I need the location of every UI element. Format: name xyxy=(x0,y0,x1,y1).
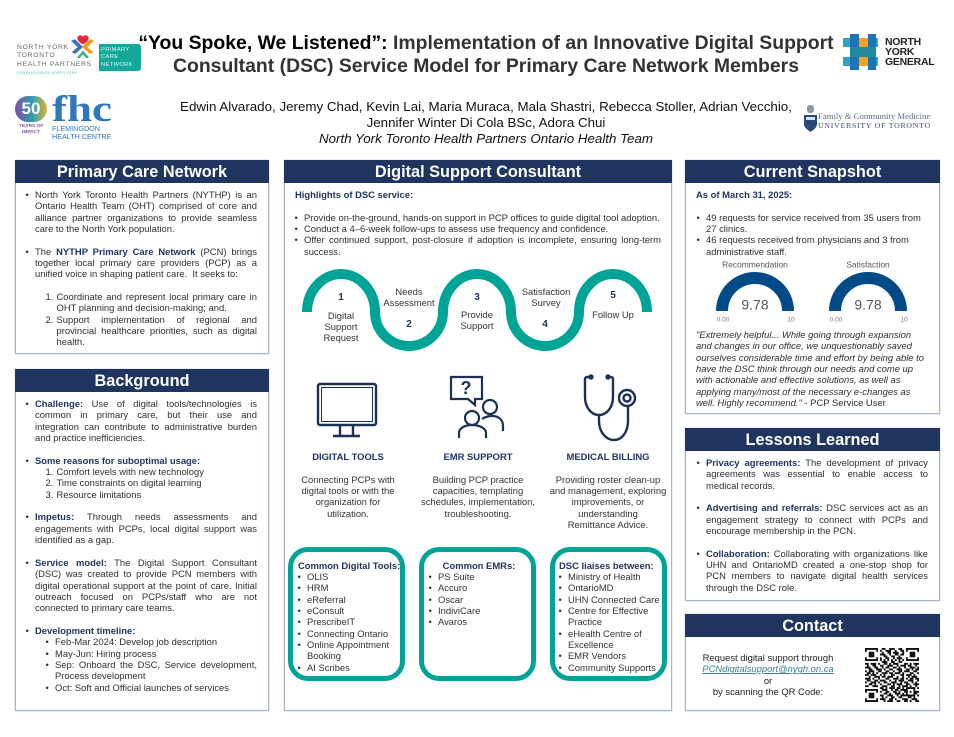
heading: Lessons Learned xyxy=(685,428,940,451)
quote: PCP service user: and changes in our office, we unquestionably saved xyxy=(696,340,912,351)
text: background points: outreach focused on PCPs/staff who are not xyxy=(35,591,257,602)
step 5: Follow Up xyxy=(592,290,634,320)
logo: University of Toronto Family and Community Medicine: UNIVERSITY OF TORONTO xyxy=(818,121,931,130)
card: DSC liaises between: • xyxy=(558,594,562,605)
card: DSC liaises between: • xyxy=(558,628,562,639)
step 3: Provide Support: 3 xyxy=(474,292,480,303)
gauge: Satisfaction 9.78: 9.78 xyxy=(854,296,881,312)
logo: Flemingdon Health Centre: IMPACT xyxy=(22,130,40,135)
card: Common Digital Tools: • xyxy=(298,616,301,627)
text: background points: (DSC) was created to provide PCN members with xyxy=(35,568,257,579)
step 3: Provide Support: Provide xyxy=(461,309,493,320)
card: Common EMRs: IndiviCare xyxy=(438,605,480,616)
card: Common Digital Tools: • xyxy=(298,639,301,650)
service: EMR Support: capacities, templating xyxy=(433,485,523,496)
gauge: Satisfaction 9.78 xyxy=(829,260,908,324)
card: Common Digital Tools: HRM xyxy=(307,582,328,593)
panel: Lessons Learned: • xyxy=(696,457,700,468)
heading: Contact: Contact xyxy=(782,617,843,635)
step 4: Satisfaction Survey: Satisfaction xyxy=(522,286,570,296)
service: Digital Tools: organization for xyxy=(316,496,380,507)
text: contact details: Request digital support through xyxy=(703,652,833,663)
logo: North York Toronto Health Partners and Primary Care Network: CARE xyxy=(101,54,118,60)
text: background points: and practice inefficiencies. xyxy=(35,432,145,443)
card: DSC liaises between: • xyxy=(558,662,562,673)
card: Common Digital Tools: • xyxy=(298,628,301,639)
card: Common Digital Tools: • xyxy=(298,582,301,593)
card: Common Digital Tools: PrescribeIT xyxy=(307,616,355,627)
heading: Primary Care Network: Primary Care Network xyxy=(57,163,227,181)
card: Common Digital Tools: Online Appointment xyxy=(307,639,389,650)
service: EMR Support: Building PCP practice xyxy=(433,474,523,484)
text: network description: care to the North York population. xyxy=(35,223,175,234)
text: network description: alliance partner organizations to provide seamless xyxy=(35,212,257,223)
card: DSC liaises between: Practice xyxy=(568,616,602,627)
heading: Digital Support Consultant: Digital Support Consultant xyxy=(375,163,581,181)
text: highlights of DSC service: success. xyxy=(304,246,341,257)
gauge: Satisfaction 9.78: 0.00 xyxy=(829,316,842,324)
text: lessons xyxy=(696,457,928,593)
logo: Flemingdon Health Centre: YEARS OF xyxy=(19,124,43,129)
card: Common Digital Tools: eConsult xyxy=(307,605,344,616)
text: background points: Development timeline: xyxy=(35,625,135,636)
card: Common EMRs: • xyxy=(428,605,432,616)
service: Digital Tools: Connecting PCPs with xyxy=(301,474,395,484)
service: EMR Support: schedules, implementation, xyxy=(421,496,535,507)
text: lessons: encourage membership in the PCN. xyxy=(706,525,856,536)
text: background points: Service model: The Digital Support Consultant xyxy=(35,557,257,568)
panel: Current Snapshot xyxy=(684,160,940,414)
text: lessons: agreements was essential to enable access to xyxy=(706,468,928,479)
card: Common Digital Tools xyxy=(288,547,405,681)
text: background points: Challenge: Use of digital tools/technologies is xyxy=(35,398,257,409)
text: background points: digital operational support at the point of care. Initial xyxy=(35,580,257,590)
text: background points: May-Jun: Hiring process xyxy=(55,648,156,659)
authors: North York Toronto Health Partners Ontario Health Team xyxy=(319,131,653,146)
panel: Background: • xyxy=(26,455,29,466)
card: Common Digital Tools: • xyxy=(298,662,301,673)
card: DSC liaises between: • xyxy=(558,571,562,582)
gauge: Recommendation 9.78: 0.00 xyxy=(717,316,730,324)
text: highlights of DSC service xyxy=(294,189,661,257)
heading: Lessons Learned: Lessons Learned xyxy=(746,431,879,449)
text: highlights of DSC service: Conduct a 4–6-week follow-ups to assess use frequency and confidence. xyxy=(304,223,608,234)
text: network description: together local primary care providers (PCP) as a xyxy=(35,257,257,268)
panel: Background: • xyxy=(26,511,29,522)
step 3: Provide Support: Support xyxy=(461,320,493,331)
service: Medical Billing: Providing roster clean-up xyxy=(556,474,660,484)
panel: Digital Support Consultant xyxy=(284,160,672,712)
text: network description: provincial healthcare priorities, such as digital xyxy=(56,325,257,336)
quote: PCP service user: applying many/most of the necessary e-changes as xyxy=(696,386,910,397)
logo: Flemingdon Health Centre: fhc xyxy=(52,88,112,129)
logo: North York Toronto Health Partners and Primary Care Network: PRIMARY xyxy=(101,47,130,53)
quote: PCP service user: well. Highly recommend." - PCP Service User xyxy=(696,397,886,408)
text: snapshot figures: • xyxy=(696,212,700,223)
text: background points: 3. xyxy=(46,489,53,500)
text: lessons: Advertising and referrals: DSC services act as an xyxy=(706,502,928,513)
quote: PCP service user: with actionable and effective solutions, as well as xyxy=(696,374,900,385)
text: contact details: PCNdigitalsupport@nygh.on.ca xyxy=(702,663,834,674)
logo: University of Toronto Family and Community Medicine: Family & Community Medicine xyxy=(818,111,930,121)
service: Digital Tools: utilization. xyxy=(327,508,369,519)
heading: Digital Support Consultant xyxy=(284,160,672,183)
text: lessons: PCN members to navigate digital health services xyxy=(706,570,928,581)
step 1: Digital Support Request: Digital xyxy=(328,310,354,320)
text: network description: 2. xyxy=(46,314,53,325)
service: Medical Billing: improvements, or xyxy=(572,496,644,507)
card: Common EMRs: Accuro xyxy=(438,582,467,593)
text: highlights of DSC service: • xyxy=(294,223,298,234)
card: Common EMRs: Common EMRs: xyxy=(443,560,515,570)
text: lessons: Collaboration: Collaborating with organizations like xyxy=(706,548,928,559)
card: Common EMRs xyxy=(419,547,536,681)
logo: North York General: GENERAL xyxy=(885,57,934,68)
step 1: Digital Support Request xyxy=(323,292,359,343)
panel: Contact xyxy=(684,614,940,712)
logo: North York Toronto Health Partners and Primary Care Network: NETWORK xyxy=(101,62,133,68)
text: snapshot figures: As of March 31, 2025: xyxy=(696,189,792,200)
logo: University of Toronto Family and Community Medicine xyxy=(804,105,931,132)
service: EMR Support: EMR SUPPORT xyxy=(444,451,512,462)
icon: computer monitor xyxy=(316,382,378,438)
card: Common Digital Tools: • xyxy=(298,605,301,616)
text: contact details: or xyxy=(764,675,772,686)
service: Medical Billing: MEDICAL BILLING xyxy=(567,451,649,462)
heading: Background: Background xyxy=(94,372,190,390)
card: DSC liaises between xyxy=(550,547,667,681)
card: DSC liaises between: eHealth Centre of xyxy=(568,628,642,639)
logo: Flemingdon Health Centre: HEALTH CENTRE xyxy=(52,132,111,141)
text: network description: Ontario Health Team (OHT) comprised of core and xyxy=(35,200,257,211)
authors: Edwin Alvarado, Jeremy Chad, Kevin Lai, Maria Muraca, Mala Shastri, Rebecca Stoller, Adrian Vecchio, xyxy=(180,99,792,114)
text: background points: 1. xyxy=(46,466,53,477)
logo: North York General: YORK xyxy=(885,47,914,58)
text: background points: identified as a gap. xyxy=(35,534,114,545)
text: snapshot figures xyxy=(696,189,921,257)
card: Common Digital Tools: AI Scribes xyxy=(307,662,350,673)
card: Common EMRs: Avaros xyxy=(438,616,467,627)
text: background points: Some reasons for suboptimal usage: xyxy=(35,455,200,466)
card: DSC liaises between: Community Supports xyxy=(568,662,656,673)
text: highlights of DSC service: Provide on-the-ground, hands-on support in PCP offices to guide digital tool adoption. xyxy=(304,212,660,223)
text: background points: Impetus: Through needs assessments and xyxy=(35,511,257,522)
text: background points: Time constraints on digital learning xyxy=(56,477,202,488)
card: Common Digital Tools: Booking xyxy=(307,650,341,661)
quote: PCP service user: ourselves considerable time and effort by being able to xyxy=(696,352,924,363)
card: Common EMRs: • xyxy=(428,594,432,605)
service: Medical Billing: Remittance Advice. xyxy=(568,519,648,530)
step 1: Digital Support Request: Support xyxy=(325,321,357,332)
step 5: Follow Up: 5 xyxy=(610,290,616,301)
text: contact details: by scanning the QR Code: xyxy=(713,686,823,697)
card: Common Digital Tools: • xyxy=(298,571,301,582)
text: snapshot figures: administrative staff. xyxy=(706,246,787,257)
icon: people with question bubble: ? xyxy=(460,378,472,398)
text: network description: Support implementation of regional and xyxy=(56,314,257,325)
text: background points: Resource limitations xyxy=(56,489,141,500)
text: network description: The NYTHP Primary Care Network (PCN) brings xyxy=(35,246,257,257)
step 5: Follow Up: Follow Up xyxy=(592,309,634,320)
service: Medical Billing: understanding xyxy=(578,508,638,519)
text: background points: Feb-Mar 2024: Develop job description xyxy=(55,636,217,647)
text: background points: 2. xyxy=(46,477,53,488)
step 1: Digital Support Request: Request xyxy=(323,332,359,343)
text: lessons: UHN and OntarioMD created a one-stop shop for xyxy=(706,559,928,570)
logo: Flemingdon Health Centre xyxy=(15,88,112,141)
panel: Background: • xyxy=(26,557,29,568)
logo: North York Toronto Health Partners and Primary Care Network: NORTH YORK xyxy=(17,44,69,51)
service: Digital Tools: DIGITAL TOOLS xyxy=(312,451,384,462)
card: DSC liaises between: OntarioMD xyxy=(568,582,613,593)
service: EMR Support: troubleshooting. xyxy=(445,508,511,519)
text: background points: Process development xyxy=(55,670,145,681)
logo: Flemingdon Health Centre: 50 xyxy=(22,99,40,118)
card: DSC liaises between: EMR Vendors xyxy=(568,650,626,661)
logo: Flemingdon Health Centre: FLEMINGDON xyxy=(52,124,100,132)
heading: Background xyxy=(15,369,269,392)
step 4: Satisfaction Survey xyxy=(522,286,570,330)
heading: Current Snapshot: Current Snapshot xyxy=(744,163,881,181)
quote: PCP service user: "Extremely helpful... While going through expansion xyxy=(696,329,911,340)
authors: Jennifer Winter Di Cola BSc, Adora Chui xyxy=(367,115,605,130)
card: Common Digital Tools: Common Digital Tools: xyxy=(298,560,400,570)
text: background points: Oct: Soft and Official launches of services xyxy=(55,682,229,693)
text: network description: Coordinate and represent local primary care in xyxy=(56,291,257,302)
authors xyxy=(180,99,792,146)
logo: North York General xyxy=(843,34,934,70)
text: background points: connected to primary care teams. xyxy=(35,602,175,613)
panel: Lessons Learned: • xyxy=(696,502,700,513)
text: lessons: Privacy agreements: The development of privacy xyxy=(706,457,928,468)
panel: Background: • xyxy=(26,398,29,409)
QR code xyxy=(865,648,919,702)
text: background points: integration can contribute to administrative burden xyxy=(35,421,257,432)
text: snapshot figures: 27 clinics. xyxy=(706,223,747,234)
text: contact details xyxy=(702,652,834,697)
step 2: Needs Assessment: Assessment xyxy=(383,297,435,308)
text: snapshot figures: 49 requests for service received from 35 users from xyxy=(706,212,921,223)
logo: North York General: NORTH xyxy=(885,36,921,48)
card: Common Digital Tools: OLIS xyxy=(307,571,328,582)
text: snapshot figures: • xyxy=(696,234,700,245)
quote: PCP service user xyxy=(696,329,924,408)
gauge: Recommendation 9.78: 9.78 xyxy=(741,296,769,312)
card: DSC liaises between: DSC liaises between: xyxy=(559,560,654,570)
card: DSC liaises between: • xyxy=(558,605,562,616)
card: Common EMRs: Oscar xyxy=(438,594,463,605)
logo: North York Toronto Health Partners and Primary Care Network xyxy=(17,35,141,75)
step 3: Provide Support xyxy=(461,292,494,331)
card: Common EMRs: • xyxy=(428,571,432,582)
text: lessons: engagement strategy to connect with PCPs and xyxy=(706,514,928,525)
card: DSC liaises between: Centre for Effective xyxy=(568,605,648,616)
logo: North York Toronto Health Partners and Primary Care Network: COMPASSIONATE NORTH YORK xyxy=(17,71,77,75)
card: Common Digital Tools: • xyxy=(298,594,301,605)
text: background points: Comfort levels with new technology xyxy=(56,466,204,477)
text: background points: • xyxy=(46,659,49,670)
step 2: Needs Assessment: 2 xyxy=(406,318,412,330)
card: DSC liaises between: UHN Connected Care xyxy=(568,594,660,605)
text: network description: OHT planning and decision-making; and. xyxy=(56,302,227,313)
panel: Background: • xyxy=(26,625,29,636)
text: network description: 1. xyxy=(46,291,53,302)
gauge: Recommendation 9.78: 10 xyxy=(787,316,795,324)
panel: Primary Care Network: • xyxy=(26,189,29,200)
heading: Current Snapshot xyxy=(685,160,940,183)
service: Medical Billing: and management, exploring xyxy=(550,485,666,496)
card: DSC liaises between: Excellence xyxy=(568,639,614,650)
card: Common EMRs: • xyxy=(428,616,432,627)
panel: Primary Care Network xyxy=(14,160,270,354)
text: background points xyxy=(26,398,257,693)
text: highlights of DSC service: Highlights of DSC service: xyxy=(295,189,413,200)
text: background points: common in primary care, but their use and xyxy=(35,409,257,420)
text: network description: unified voice in shaping patient care. It seeks to: xyxy=(35,268,238,279)
heading: Contact xyxy=(685,614,940,637)
panel: Primary Care Network: • xyxy=(26,246,29,257)
text: background points: • xyxy=(46,682,49,693)
panel: Lessons Learned: • xyxy=(696,548,700,559)
card: DSC liaises between: • xyxy=(558,650,562,661)
quote: PCP service user: have the DSC think through our needs and come up xyxy=(696,363,913,374)
title: Consultant (DSC) Service Model for Primary Care Network Members xyxy=(173,55,799,77)
text: highlights of DSC service: • xyxy=(294,212,298,223)
panel: Background xyxy=(14,368,270,712)
gauge: Satisfaction 9.78: Satisfaction xyxy=(846,260,889,270)
text: lessons: medical records. xyxy=(706,480,775,491)
card: Common EMRs: • xyxy=(428,582,432,593)
icon: stethoscope xyxy=(584,374,636,442)
heading: Primary Care Network xyxy=(15,160,269,183)
gauge: Recommendation 9.78 xyxy=(716,260,795,324)
text: background points: • xyxy=(46,636,49,647)
text: lessons: through the DSC role. xyxy=(706,582,797,593)
service: Digital Tools xyxy=(301,451,395,519)
text: network description: North York Toronto Health Partners (NYTHP) is an xyxy=(35,189,257,200)
text: network description: health. xyxy=(56,336,85,347)
step 4: Satisfaction Survey: 4 xyxy=(542,318,548,330)
card: Common Digital Tools: eReferral xyxy=(307,594,346,605)
step 2: Needs Assessment: Needs xyxy=(395,286,423,296)
text: snapshot figures: 46 requests received from physicians and 3 from xyxy=(706,234,909,245)
text: background points: Sep: Onboard the DSC, Service development, xyxy=(55,659,257,670)
card: DSC liaises between: • xyxy=(558,582,562,593)
panel: Lessons Learned xyxy=(684,428,940,602)
logo: North York Toronto Health Partners and Primary Care Network: HEALTH PARTNERS xyxy=(17,61,92,68)
service: Medical Billing xyxy=(550,451,666,530)
text: highlights of DSC service: Offer continued support, post-closure if adoption is incomplete, ensuring long-term xyxy=(304,234,661,245)
card: Common EMRs: PS Suite xyxy=(438,571,475,582)
step 1: Digital Support Request: 1 xyxy=(338,292,344,303)
service: Digital Tools: digital tools or with the xyxy=(301,485,395,496)
step 4: Satisfaction Survey: Survey xyxy=(531,297,561,308)
process wave: five steps xyxy=(302,269,652,351)
logo: North York Toronto Health Partners and Primary Care Network: TORONTO xyxy=(17,52,55,59)
card: Common Digital Tools: Connecting Ontario xyxy=(307,628,388,639)
text: background points: • xyxy=(46,648,49,659)
service: EMR Support xyxy=(421,451,535,519)
text: network description xyxy=(26,189,257,347)
gauge: Satisfaction 9.78: 10 xyxy=(900,316,907,324)
title: “You Spoke, We Listened”: Implementation of an Innovative Digital Support xyxy=(138,32,834,54)
text: highlights of DSC service: • xyxy=(294,234,298,245)
step 2: Needs Assessment xyxy=(383,286,435,330)
card: DSC liaises between: Ministry of Health xyxy=(568,571,641,582)
text: background points: engagements with PCPs, local digital support was xyxy=(35,523,257,534)
title xyxy=(138,32,834,77)
icon: people with question bubble xyxy=(450,376,504,438)
gauge: Recommendation 9.78: Recommendation xyxy=(722,260,788,270)
